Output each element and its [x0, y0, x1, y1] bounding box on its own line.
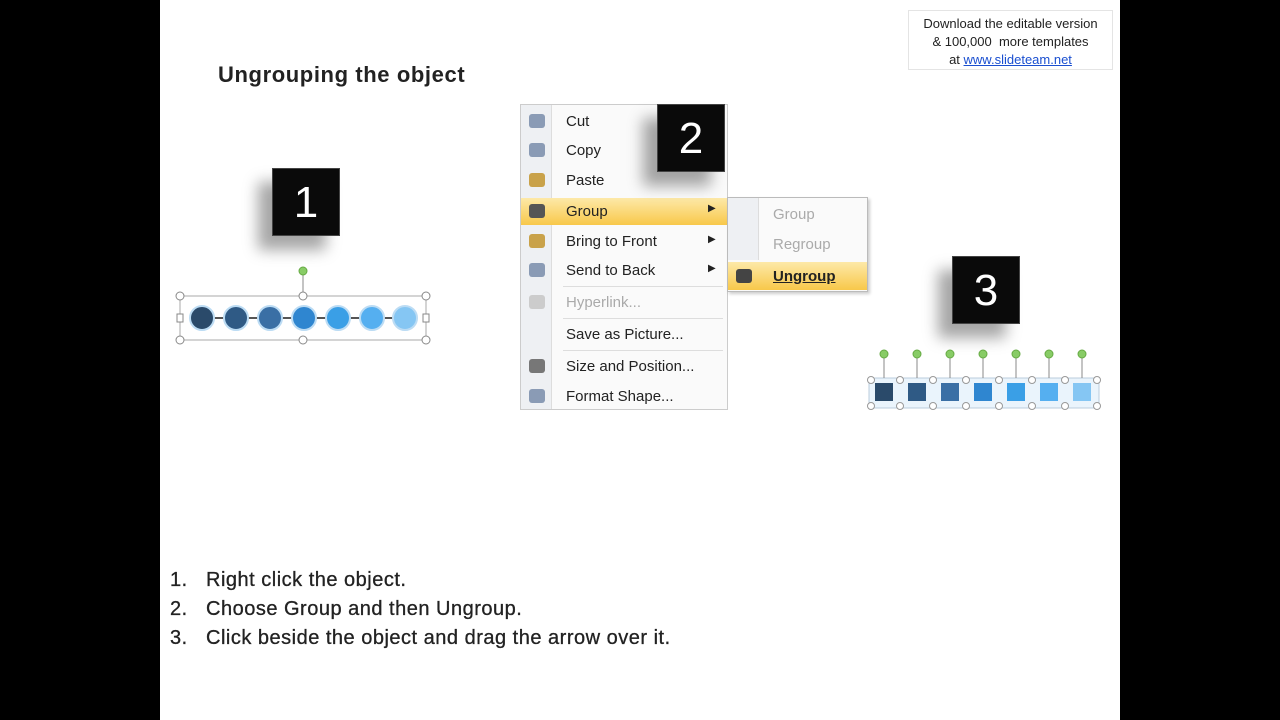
badge 3	[952, 256, 1020, 324]
ungrouped squares	[867, 350, 1101, 410]
context menu: ▶	[708, 203, 716, 214]
context menu: Size and Position...	[566, 358, 694, 375]
instructions: Click beside the object and drag the arrow over it.	[206, 627, 671, 649]
instructions: Right click the object.	[206, 569, 406, 591]
context menu: Save as Picture...	[566, 326, 684, 343]
instructions: Choose Group and then Ungroup.	[206, 598, 522, 620]
download note: Download the editable version	[923, 16, 1098, 31]
badge 3: 3	[974, 266, 998, 315]
context menu: Paste	[566, 172, 604, 189]
context menu: Hyperlink...	[566, 294, 641, 311]
submenu: Group	[773, 206, 815, 223]
context menu: Format Shape...	[566, 388, 674, 405]
badge 2: 2	[679, 114, 703, 163]
badge 1	[272, 168, 340, 236]
badge 2	[657, 104, 725, 172]
context menu: Copy	[566, 142, 601, 159]
grouped circles object	[176, 266, 430, 344]
download note: at www.slideteam.net	[949, 52, 1072, 67]
context menu: ▶	[708, 234, 716, 245]
context menu: ▶	[708, 263, 716, 274]
submenu: Ungroup	[773, 268, 835, 285]
context menu: Group	[566, 203, 608, 220]
instructions	[170, 569, 671, 649]
context menu: Cut	[566, 113, 589, 130]
badge 1: 1	[294, 178, 318, 227]
slide	[160, 0, 1120, 720]
context menu: Bring to Front	[566, 233, 657, 250]
instructions: 2.	[170, 598, 188, 620]
context menu	[520, 104, 728, 410]
title: Ungrouping the object	[218, 62, 465, 87]
download note	[908, 10, 1113, 70]
submenu	[727, 197, 868, 292]
submenu: Regroup	[773, 236, 831, 253]
instructions: 3.	[170, 627, 188, 649]
context menu: Send to Back	[566, 262, 655, 279]
instructions: 1.	[170, 569, 188, 591]
download note: & 100,000 more templates	[932, 34, 1089, 49]
